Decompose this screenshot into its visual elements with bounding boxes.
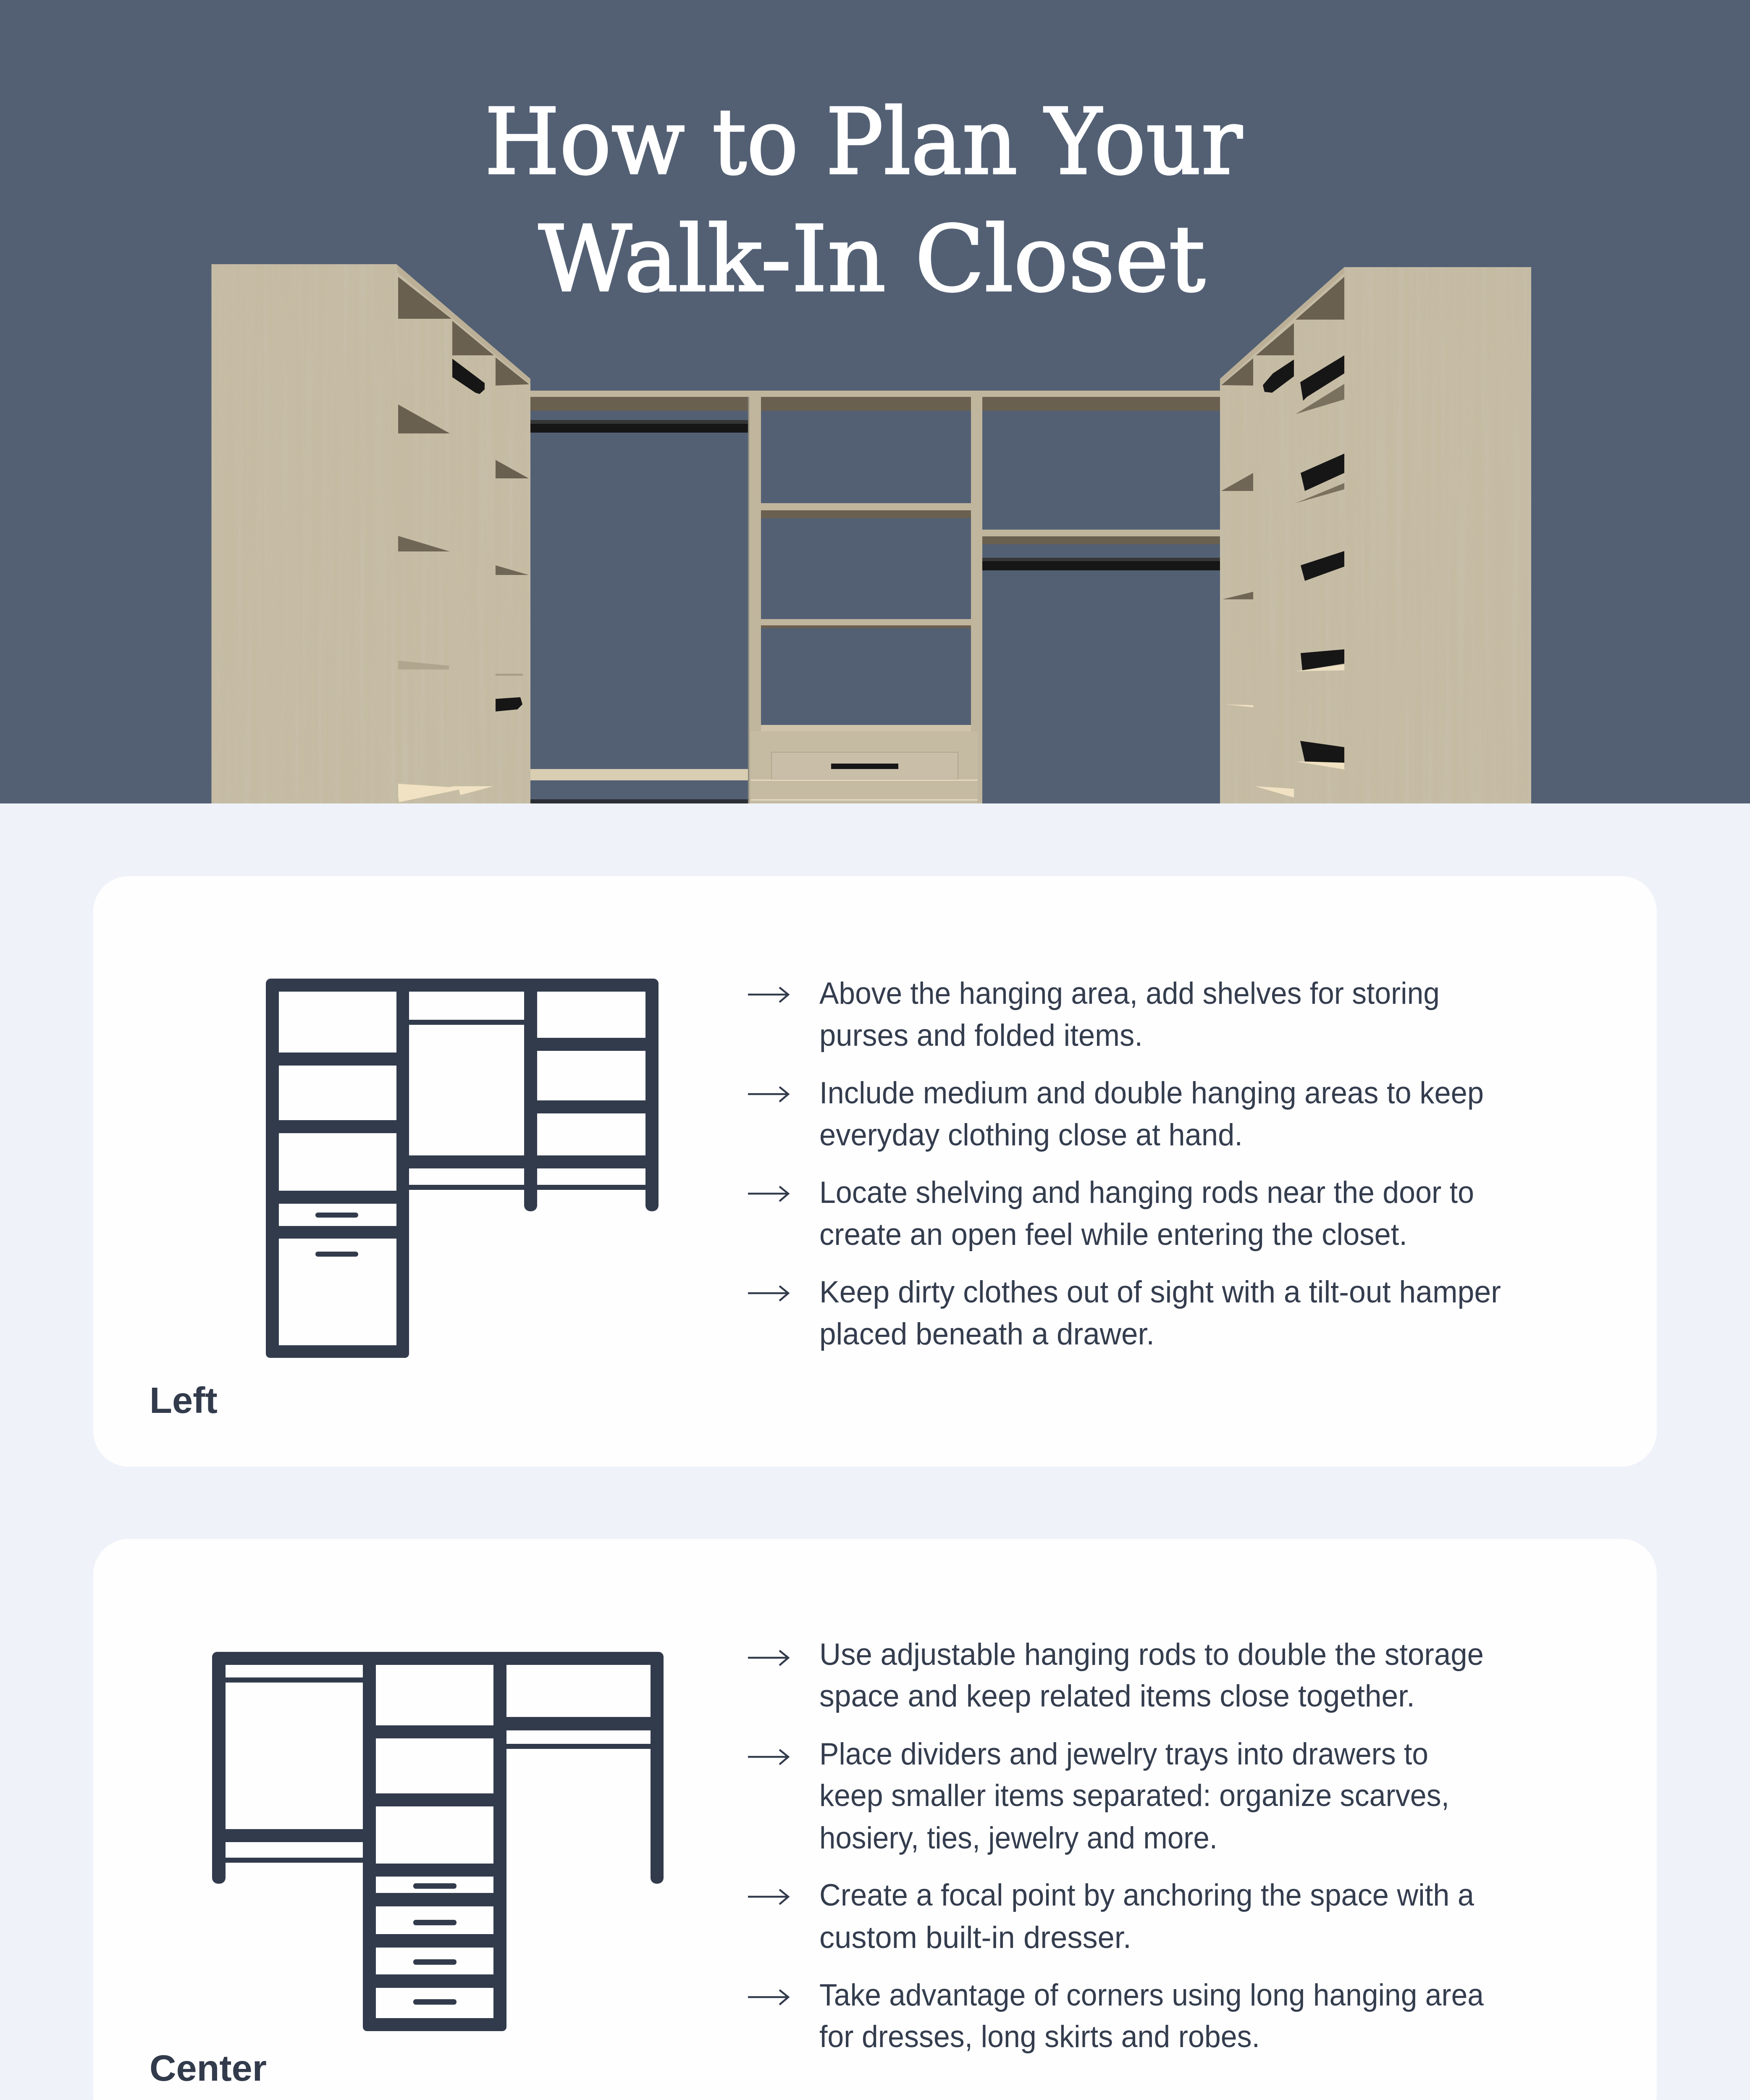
tips: center: Use adjustable hanging rods to double the storage [819,1638,1484,1672]
tips: left [748,976,1501,1351]
closet illustration: center section [530,391,1220,803]
tips: left: purses and folded items. [819,1018,1143,1053]
tips: center: Create a focal point by anchoring the space with a [819,1878,1474,1912]
panel: center [93,1539,1657,2100]
tips: left: placed beneath a drawer. [819,1317,1154,1351]
tips: center: Take advantage of corners using long hanging area [819,1978,1484,2012]
icon: center closet diagram [212,1652,664,2031]
panel: left [93,876,1657,1467]
tips: left: everyday clothing close at hand. [819,1118,1243,1152]
title: Walk-In Closet [538,207,1205,312]
closet illustration: right tower [1220,267,1531,803]
tips: left: Locate shelving and hanging rods near the door to [819,1176,1474,1210]
title: How to Plan Your [485,89,1242,195]
label: left: Left [150,1380,218,1421]
tips: left: Keep dirty clothes out of sight with a tilt-out hamper [819,1275,1501,1309]
tips: left: create an open feel while entering the closet. [819,1218,1407,1252]
tips: center: space and keep related items close together. [819,1679,1415,1713]
closet illustration: left tower [211,264,530,803]
title [485,89,1242,312]
tips: center: for dresses, long skirts and robes. [819,2020,1260,2054]
drawer [751,731,978,803]
tips: left: Above the hanging area, add shelves for storing [819,976,1440,1011]
tips: center [748,1638,1484,2054]
hero banner [0,0,1750,803]
tips: center: hosiery, ties, jewelry and more. [819,1821,1217,1855]
tips: left: Include medium and double hanging areas to keep [819,1076,1484,1110]
tips: center: custom built-in dresser. [819,1921,1131,1955]
tips: center: keep smaller items separated: organize scarves, [819,1779,1449,1813]
icon: left closet diagram [266,979,659,1358]
label: center: Center [150,2048,267,2089]
tips: center: Place dividers and jewelry trays into drawers to [819,1737,1428,1771]
